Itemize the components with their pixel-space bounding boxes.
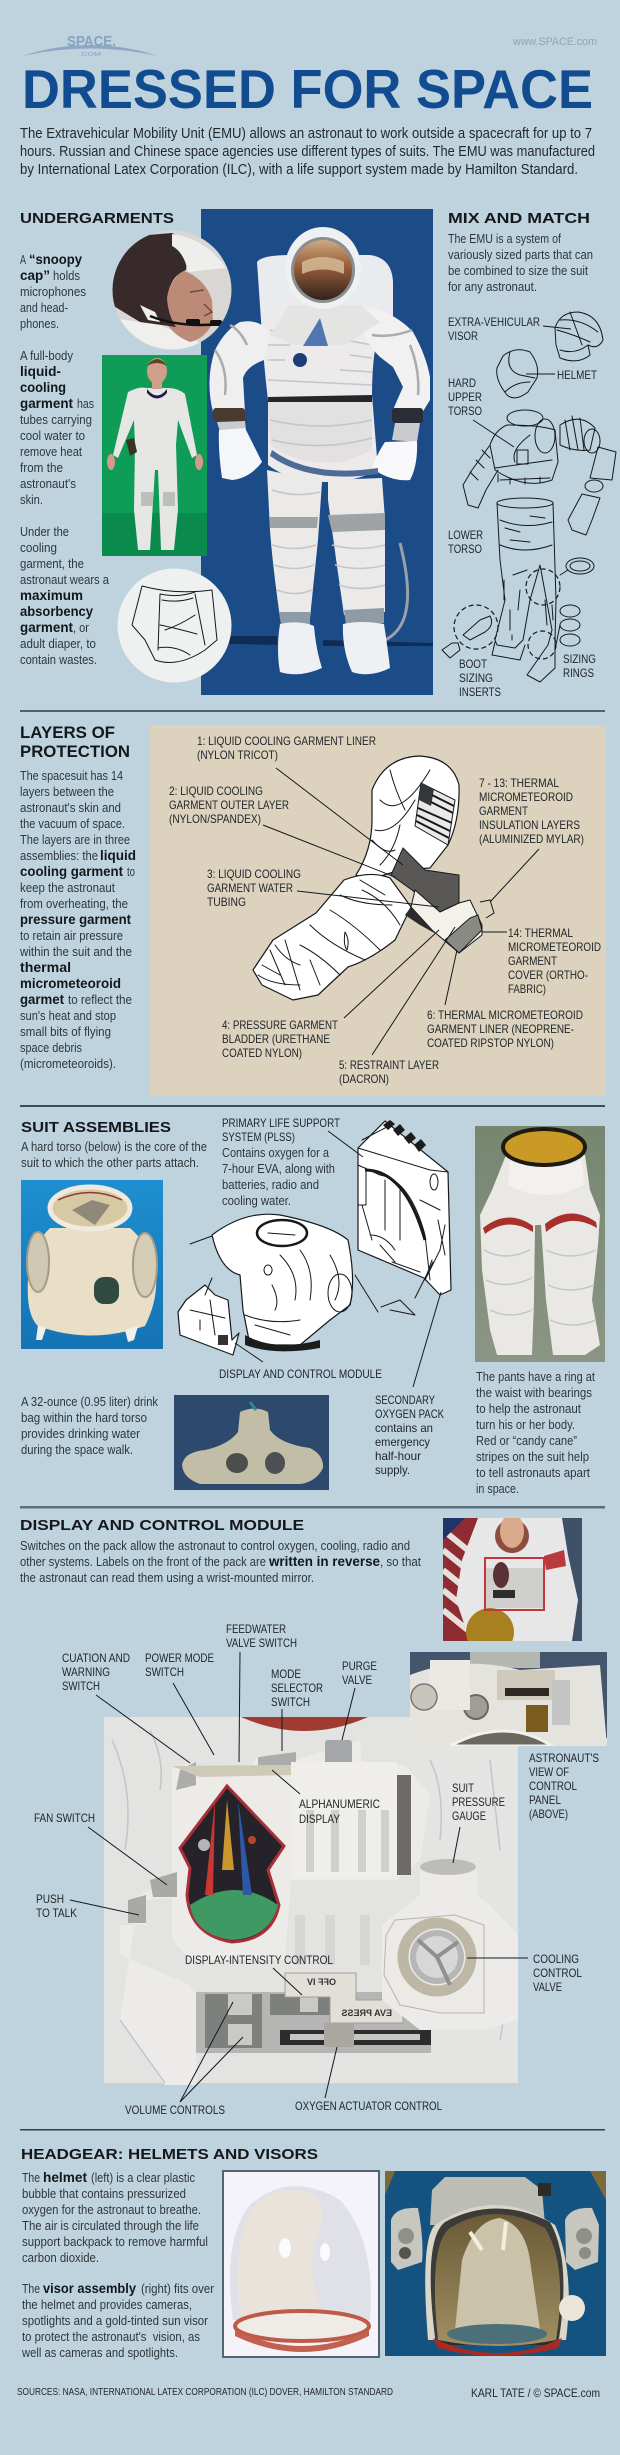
pants text: to tell astronauts apart [476,1465,590,1480]
layer labels: MICROMETEOROID [479,790,573,804]
description: from overheating, the [20,896,128,911]
photo: liquid cooling garment [102,355,207,556]
pants text: Red or “candy cane” [476,1433,577,1448]
pants text: in space. [476,1481,519,1496]
module labels: MODE [271,1667,301,1681]
description: liquid [100,848,136,863]
liquid cooling garment text: cooling [20,380,66,395]
module labels: FEEDWATER [226,1622,286,1636]
pants text: stripes on the suit help [476,1449,589,1464]
description: pressure garment [20,912,131,927]
description [19,768,136,1071]
header [20,33,597,178]
snoopy cap text: and head- [20,300,68,315]
title: DRESSED FOR SPACE [22,58,593,120]
illustration: suit arm cross section [253,756,482,1000]
description: thermal [20,960,71,975]
photo: hard torso [21,1180,163,1349]
module labels: VIEW OF [529,1765,569,1779]
panel: main astronaut photo [201,209,433,695]
hard torso text: A hard torso (below) is the core of the [21,1139,207,1154]
visor text: spotlights and a gold-tinted sun visor [22,2313,209,2328]
description: other systems. Labels on the front of the pack are [20,1554,266,1569]
panel: headgear [17,2146,606,2400]
module labels: POWER MODE [145,1651,214,1665]
description: space debris [20,1040,82,1055]
callout labels: EXTRA-VEHICULAR [448,315,540,329]
absorbency garment text: Under the [20,524,69,539]
module labels: ASTRONAUT'S [529,1751,599,1765]
photo: module main view: EVA PRESS [341,2008,392,2018]
liquid cooling garment text: cool water to [20,428,85,443]
description: The EMU is a system of [448,231,561,246]
description: be combined to size the suit [448,263,588,278]
layer labels: GARMENT [479,804,529,818]
description: layers between the [20,784,114,799]
visor text: well as cameras and spotlights. [21,2345,178,2360]
pants text: The pants have a ring at [476,1369,595,1384]
visor text: (right) fits over [141,2281,215,2296]
description [448,231,593,294]
module labels: PURGE [342,1659,377,1673]
layer labels: 1: LIQUID COOLING GARMENT LINER [197,734,376,748]
module labels: VALVE SWITCH [226,1636,297,1650]
snoopy cap text: cap” [20,268,50,283]
layer labels: COATED NYLON) [222,1046,302,1060]
layer labels: 7 - 13: THERMAL [479,776,559,790]
helmet text [22,2170,208,2265]
layer labels: 4: PRESSURE GARMENT [222,1018,339,1032]
callout labels: RINGS [563,666,594,680]
photo: astronaut portrait with highlighted module [443,1518,582,1641]
layer labels: BLADDER (URETHANE [222,1032,330,1046]
absorbency garment text: absorbency [20,604,93,619]
illustration: hard upper torso assembly [190,1214,433,1351]
module labels: OXYGEN ACTUATOR CONTROL [295,2099,442,2113]
module labels: CONTROL [533,1966,582,1980]
liquid cooling garment text: garment [20,396,73,411]
snoopy cap text: A [20,252,26,267]
description: astronaut's skin and [20,800,121,815]
layer labels: 6: THERMAL MICROMETEOROID [427,1008,583,1022]
panel: undergarments [20,210,232,682]
description: cooling garment [20,864,123,879]
description: (micrometeoroids). [20,1056,116,1071]
callout: secondary oxygen pack [375,1393,444,1477]
callout: PLSS: SYSTEM (PLSS) [222,1130,295,1144]
intro text [20,126,595,178]
module labels: SWITCH [145,1665,184,1679]
description: sun's heat and stop [20,1008,116,1023]
callout labels [448,315,598,699]
exploded suit line art [442,312,616,682]
module labels [34,1622,599,2117]
absorbency garment text: garment, the [20,556,84,571]
drink bag text [21,1394,158,1457]
pants text [476,1369,595,1496]
pants text: to help the astronaut [476,1401,581,1416]
description: keep the astronaut [20,880,115,895]
callout: PLSS [222,1116,341,1208]
website: www.SPACE.com [512,36,597,48]
callout labels: LOWER [448,528,483,542]
module labels: FAN SWITCH [34,1811,95,1825]
module labels: DISPLAY-INTENSITY CONTROL [185,1953,333,1967]
layer labels: GARMENT WATER [207,881,293,895]
illustration: display and control module [178,1278,239,1355]
module labels: CONTROL [529,1779,577,1793]
liquid cooling garment text: remove heat [20,444,82,459]
photo: snoopy cap [112,230,232,352]
snoopy cap text: microphones [20,284,86,299]
absorbency garment text: , or [73,620,90,635]
callout labels: BOOT [459,657,488,671]
snoopy cap text: “snoopy [29,252,82,267]
module labels: VALVE [342,1673,372,1687]
panel: display and control module [20,1514,607,2117]
snoopy cap text: holds [53,268,80,283]
layer labels: 14: THERMAL [508,926,573,940]
snoopy cap text: phones. [20,316,59,331]
intro text: by International Latex Corporation (ILC), with a life support system made by Hamilton Standard. [20,162,578,178]
drink bag text: provides drinking water [21,1426,141,1441]
layer labels: COVER (ORTHO- [508,968,588,982]
snoopy cap text [20,252,86,331]
module labels: WARNING [62,1665,110,1679]
logo [22,33,158,58]
liquid cooling garment text: has [77,396,94,411]
description: assemblies: the [20,848,98,863]
layer labels: 2: LIQUID COOLING [169,784,263,798]
liquid cooling garment text [20,348,94,507]
logo: SPACE. [67,33,116,50]
visor text: visor assembly [43,2281,136,2296]
description: garmet [20,992,64,1007]
callout: secondary oxygen pack: half-hour [375,1449,421,1463]
helmet text: support backpack to remove harmful [22,2234,208,2249]
description: variously sized parts that can [448,247,593,262]
layer labels: (DACRON) [339,1072,389,1086]
assembly leader lines [235,1131,441,1387]
heading [20,723,130,761]
absorbency garment text: garment [20,620,73,635]
module leader lines [70,1652,528,2102]
liquid cooling garment text: A full-body [20,348,73,363]
hard torso text: suit to which the other parts attach. [21,1155,199,1170]
panel: suit assemblies [21,1116,605,1496]
heading: HEADGEAR: HELMETS AND VISORS [21,2146,318,2163]
drink bag text: bag within the hard torso [21,1410,147,1425]
photo: suit pants [475,1126,605,1362]
description: Switches on the pack allow the astronaut to control oxygen, cooling, radio and [20,1538,410,1553]
callout: PLSS: Contains oxygen for a [222,1145,330,1160]
absorbency garment text [20,524,110,667]
callout labels: TORSO [448,542,482,556]
module labels: VOLUME CONTROLS [125,2103,225,2117]
description: written in reverse [268,1554,380,1569]
layer labels: MICROMETEOROID [508,940,601,954]
helmet text: oxygen for the astronaut to breathe. [22,2202,201,2217]
panel: mix and match [442,210,616,699]
description: to retain air pressure [20,928,123,943]
heading: SUIT ASSEMBLIES [21,1119,171,1136]
hard torso text [21,1139,207,1170]
module labels: COOLING [533,1952,579,1966]
pants text: turn his or her body. [476,1417,575,1432]
layer labels: TUBING [207,895,246,909]
callout labels: VISOR [448,329,478,343]
layer labels: (ALUMINIZED MYLAR) [479,832,584,846]
helmet text: carbon dioxide. [22,2250,99,2265]
leader lines [473,326,571,447]
tan diagram panel [150,725,606,1096]
liquid cooling garment text: liquid- [20,364,61,379]
layer labels: FABRIC) [508,982,546,996]
callout labels: UPPER [448,390,482,404]
illustration: diaper [118,568,232,682]
callout labels: TORSO [448,404,482,418]
layer labels [169,734,601,1086]
layer labels: INSULATION LAYERS [479,818,580,832]
heading: LAYERS OF [20,723,115,742]
description: to [127,864,135,879]
module labels: PANEL [529,1793,561,1807]
module labels: DISPLAY [299,1812,340,1826]
liquid cooling garment text: tubes carrying [20,412,92,427]
layer leader lines [263,768,539,1055]
description: micrometeoroid [20,976,121,991]
description [20,1538,421,1585]
description: The layers are in three [20,832,130,847]
liquid cooling garment text: from the [20,460,63,475]
description: to reflect the [68,992,132,1007]
drink bag text: A 32-ounce (0.95 liter) drink [21,1394,158,1409]
helmet text: The [22,2170,40,2185]
layer labels: 3: LIQUID COOLING [207,867,301,881]
photo: module main view: OFF IV [307,1977,336,1987]
description: for any astronaut. [448,279,537,294]
visor text: to protect the astronaut's vision, as [22,2329,200,2344]
callout: PLSS: 7-hour EVA, along with [222,1161,335,1176]
helmet text: bubble that contains pressurized [22,2186,186,2201]
callout labels: INSERTS [459,685,501,699]
liquid cooling garment text: skin. [20,492,43,507]
module labels: VALVE [533,1980,562,1994]
photo: module main view [104,1717,518,2085]
sources: SOURCES: NASA, INTERNATIONAL LATEX CORPORATION (ILC) DOVER, HAMILTON STANDARD [17,2386,393,2398]
callout labels: HELMET [557,368,598,382]
callout: secondary oxygen pack: OXYGEN PACK [375,1407,444,1421]
illustration: PLSS backpack [358,1120,451,1295]
helmet text: helmet [43,2170,88,2185]
liquid cooling garment text: astronaut's [20,476,76,491]
helmet text: The air is circulated through the life [22,2218,199,2233]
callout labels: SIZING [459,671,493,685]
description: small bits of flying [20,1024,111,1039]
module labels: SWITCH [62,1679,100,1693]
layer labels: (NYLON/SPANDEX) [169,812,261,826]
heading: MIX AND MATCH [448,210,590,227]
callout: secondary oxygen pack: supply. [375,1463,410,1477]
description: the astronaut can read them using a wrist-mounted mirror. [20,1570,314,1585]
layer labels: (NYLON TRICOT) [197,748,278,762]
heading: UNDERGARMENTS [20,210,174,227]
absorbency garment text: adult diaper, to [20,636,96,651]
absorbency garment text: cooling [20,540,57,555]
description: within the suit and the [19,944,132,959]
description: The spacesuit has 14 [20,768,123,783]
heading: PROTECTION [20,742,130,761]
panel: layers of protection [19,723,606,1096]
callout: PLSS: batteries, radio and [222,1177,319,1192]
logo: .COM [79,52,101,58]
module labels: SWITCH [271,1695,310,1709]
photo: helmet [223,2171,379,2357]
photo: visor assembly [385,2171,606,2356]
module labels: TO TALK [36,1906,77,1920]
module labels: (ABOVE) [529,1807,568,1821]
visor text: The [22,2281,40,2296]
layer labels: GARMENT OUTER LAYER [169,798,289,812]
layer labels: GARMENT [508,954,558,968]
visor text: the helmet and provides cameras, [22,2297,192,2312]
callout: display and control module: DISPLAY AND CONTROL MODULE [219,1367,382,1381]
visor text [21,2281,215,2360]
module labels: GAUGE [452,1809,486,1823]
absorbency garment text: astronaut wears a [20,572,110,587]
callout: secondary oxygen pack: SECONDARY [375,1393,435,1407]
description: the vacuum of space. [20,816,125,831]
callout: secondary oxygen pack: emergency [375,1435,430,1449]
pants text: the waist with bearings [476,1385,592,1400]
layer labels: GARMENT LINER (NEOPRENE- [427,1022,574,1036]
photo: astronaut's view of control panel [410,1652,607,1746]
callout: PLSS: PRIMARY LIFE SUPPORT [222,1116,341,1130]
heading: DISPLAY AND CONTROL MODULE [20,1517,304,1534]
absorbency garment text: contain wastes. [20,652,97,667]
helmet text: (left) is a clear plastic [91,2170,195,2185]
credit: KARL TATE / © SPACE.com [471,2386,600,2400]
photo: drink bag [174,1395,329,1490]
description: , so that [380,1554,421,1569]
layer labels: 5: RESTRAINT LAYER [339,1058,439,1072]
module labels: PUSH [36,1892,64,1906]
module labels: PRESSURE [452,1795,505,1809]
absorbency garment text: maximum [20,588,83,603]
callout: secondary oxygen pack: contains an [375,1421,433,1435]
module labels: SELECTOR [271,1681,323,1695]
module labels: SUIT [452,1781,475,1795]
callout: PLSS: cooling water. [222,1193,291,1208]
module labels: ALPHANUMERIC [299,1797,380,1811]
drink bag text: during the space walk. [21,1442,133,1457]
module labels: CUATION AND [62,1651,130,1665]
callout labels: SIZING [563,652,596,666]
layer labels: COATED RIPSTOP NYLON) [427,1036,554,1050]
callout labels: HARD [448,376,476,390]
